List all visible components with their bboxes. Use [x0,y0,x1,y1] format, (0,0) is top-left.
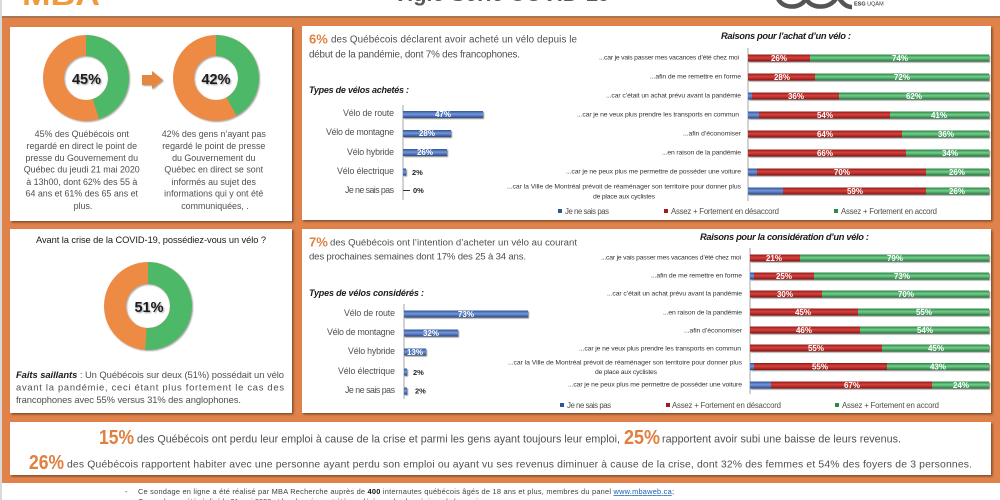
stat: 6% [309,32,578,60]
bar chart: raisons considération: 24% [953,381,969,390]
donut: 45% [54,46,118,110]
bar chart: types considérés: Je ne sais pas [345,385,396,395]
stat: 6%: des Québécois déclarent avoir acheté un vélo depuis le [331,34,578,46]
panel: emploi et revenus [10,422,991,475]
bar chart: types achetés: 2% [412,168,423,177]
bar chart: types achetés [326,105,483,200]
bar chart: types achetés: Vélo de montagne [326,127,394,137]
bar chart: raisons considération: ...car je ne peux plus me permettre de posséder une voiture [568,382,742,388]
bar chart: raisons achat: ...afin de me remettre en forme [650,74,741,80]
stat line: 15% et 25%: 15% [99,427,134,449]
legend: raisons achat: Assez + Fortement en désaccord [671,207,779,216]
stat line: 15% et 25%: des Québécois ont perdu leur emploi à cause de la crise et parmi les gens ayant toujours leur emploi, [137,434,620,446]
bar chart: raisons achat [507,48,989,201]
bar chart: raisons considération: 70% [898,290,914,299]
bar chart: raisons achat: 26% [771,54,787,63]
stat: 7% [309,234,577,262]
bar chart: types considérés: 13% [407,348,423,357]
stat line: 15% et 25%: 25% [624,427,660,449]
text: faits saillants: Faits saillants : Un Québécois sur deux (51%) possédait un vélo [16,369,284,380]
footnotes [125,487,674,500]
bar chart: raisons considération: 30% [777,290,793,299]
bar chart: raisons achat: ...afin d’économiser [683,130,742,138]
bar chart: raisons achat: 62% [906,92,922,101]
bar chart: types achetés: Vélo électrique [337,166,394,176]
bar chart: types considérés: 2% [413,368,424,377]
bar chart: raisons considération: 46% [796,326,812,335]
bar chart: types achetés: Vélo de route [343,108,394,118]
bar chart: raisons achat: 64% [817,130,833,139]
text: 45% description: à 13h00, dont 62% des 55 à [26,177,137,187]
legend: types considérés: Je ne sais pas [567,401,611,410]
text: 42% description: 42% des gens n’ayant pas [162,129,266,139]
donut: 42% [184,46,248,110]
legend: types achetés: Je ne sais pas [565,207,609,216]
bar chart: types considérés: Vélo de montagne [327,327,395,337]
text: 42% description: informations qui y ont été [164,188,263,198]
bar chart: raisons considération: ...afin d’économiser [684,328,743,334]
bar chart: types achetés: 47% [435,110,451,119]
bar chart: raisons achat: de place aux cyclistes [593,194,656,200]
panel: point de presse [10,27,292,221]
panel: vélos considérés [302,229,991,413]
bar chart: raisons considération: 67% [844,381,860,390]
text: 45% description: 64 ans et 61% des 65 ans et [26,188,139,198]
legend: raisons achat: Assez + Fortement en accord [841,207,937,216]
text: 42% description: regardé le point de presse [162,141,265,151]
text: faits saillants [16,369,284,405]
stat line: 15% et 25% [99,427,901,449]
bar chart: raisons achat: 36% [788,92,804,101]
footnotes: - [125,487,128,496]
bar chart: raisons achat: ...en raison de la pandémie [662,150,741,156]
legend: raisons considération: Assez + Fortement en accord [842,401,939,410]
page edge [0,0,2,500]
panel: possession vélo [10,229,292,413]
bar chart: raisons considération: ...afin de me remettre en forme [651,272,742,280]
heading: types considérés: Types de vélos considérés : [309,288,424,298]
bar chart: raisons achat: 36% [938,130,954,139]
bar chart: types achetés: Vélo hybride [347,147,394,157]
heading: raisons achat: Raisons pour l’achat d’un vélo : [721,31,851,41]
bar chart: raisons considération: ...car la Ville de Montréal prévoit de réaménager son territoire pour donner plus [508,360,743,366]
panel: vélos achetés [302,26,991,220]
bar chart: raisons considération: de place aux cyclistes [595,369,658,376]
footnotes: Ce sondage en ligne a été réalisé par MBA Recherche auprès de 400 internautes québécois âgés de 18 ans et plus, membres du panel www.mbaweb.ca; [138,487,674,496]
text: faits saillants: avant la pandémie, ceci étant plus fortement le cas des [16,382,284,392]
bar chart: raisons considération [508,248,989,394]
bar chart: raisons considération: ...car c’était un achat prévu avant la pandémie [607,290,742,298]
bar chart: types considérés: 73% [458,310,474,319]
bar chart: raisons achat: 26% [949,168,965,177]
bar chart: raisons achat: ...car je ne peux plus me permettre de posséder une voiture [566,168,741,176]
bar chart: types achetés: 28% [419,129,435,138]
text: 45% description: regardé en direct le point de [26,141,137,151]
bar chart: types achetés: 26% [417,148,433,157]
bar chart: raisons achat: 66% [817,149,833,158]
bar chart: types considérés: Vélo de route [344,308,395,318]
text: faits saillants: francophones avec 55% versus 31% des anglophones. [16,394,241,405]
bar chart: raisons considération: 55% [808,344,824,353]
bar chart: raisons achat: ...car je ne veux plus prendre les transports en commun [577,112,739,118]
bar chart: raisons considération: ...en raison de la pandémie [663,310,742,316]
bar chart: raisons achat: ...car c’était un achat prévu avant la pandémie [606,92,741,100]
text: 42% description: du Gouvernement du [172,153,256,163]
text: 45% description: 45% des Québécois ont [35,129,129,139]
text: 45% description: Québec du jeudi 21 mai 2020 [24,164,140,174]
stat line: 15% et 25%: rapportent avoir subi une baisse de leurs revenus. [662,434,901,446]
bar chart: raisons achat: 72% [894,73,910,82]
stat: 6%: 6% [309,32,328,46]
donut: 45%: 45% [72,71,101,88]
donut: 42%: 42% [202,71,230,88]
bar chart: types considérés: 32% [423,329,439,338]
bar chart: raisons considération: 55% [812,362,828,372]
bar chart: raisons achat: 26% [949,187,965,196]
heading: types achetés: Types de vélos achetés : [309,85,409,95]
bar chart: raisons achat: 41% [931,111,947,120]
logo: ESG UQAM [777,0,884,8]
legend: raisons achat [664,207,937,216]
bar chart: raisons considération: 43% [930,362,946,372]
stat: 7%: 7% [309,234,328,250]
bar chart: raisons achat: 70% [834,168,850,177]
bar chart: raisons considération: 21% [766,254,782,263]
text: 42% description: informés au sujet des [172,177,257,187]
text: 45% description: plus. [74,201,92,211]
bar chart: raisons considération: ...car je vais passer mes vacances d’été chez moi [601,254,741,262]
bar chart: raisons achat: 54% [817,111,833,120]
heading: raisons considération: Raisons pour la considération d’un vélo : [700,232,869,242]
arrow [142,71,163,89]
bar chart: raisons considération: 73% [894,272,910,281]
legend: raisons considération: Assez + Fortement en désaccord [672,401,781,410]
stat: 7%: des Québécois ont l’intention d’acheter un vélo au courant [330,238,577,248]
bar chart: raisons considération: 45% [795,308,811,317]
text: 45% description: presse du Gouvernement du [26,153,138,163]
bar chart: types considérés: Vélo hybride [348,346,395,356]
bar chart: raisons achat: 59% [847,187,863,196]
donut: 51% [115,273,181,339]
bar chart: raisons considération: ...car je ne veux plus prendre les transports en commun [579,346,741,352]
bar chart: raisons achat: 34% [942,149,958,158]
header shadow [2,16,1000,18]
bar chart: raisons considération: 79% [887,254,903,263]
logo: ESG UQAM: ESG UQÀM [854,0,884,8]
bar chart: types considérés: Vélo électrique [338,366,395,376]
bar chart: raisons considération: 55% [916,308,932,317]
bar chart: raisons achat: 28% [774,73,790,82]
text: 42% description: Québec en direct se sont [164,164,264,174]
heading: possession: Avant la crise de la COVID-19, possédiez-vous un vélo ? [36,235,266,245]
stat line: 26%: 26% [29,452,64,474]
bar chart: types considérés: 2% [415,386,426,396]
bar chart: raisons considération: 45% [928,344,944,353]
bar chart: types considérés [327,304,528,399]
bar chart: types achetés: 0% [413,186,424,195]
bar chart: raisons achat: 74% [892,54,908,63]
stat line: 26% [29,452,972,474]
bar chart: raisons considération: 54% [917,326,933,335]
stat: 6%: début de la pandémie, dont 7% des francophones. [309,50,520,60]
bar chart: raisons achat: ...car la Ville de Montréal prévoit de réaménager son territoire pour donner plus [507,184,742,190]
bar chart: types achetés: Je ne sais pas [345,185,395,195]
legend: raisons considération [666,401,939,410]
donut: 51%: 51% [134,299,164,316]
bar chart: raisons achat: ...car je vais passer mes vacances d’été chez moi [599,54,739,62]
bar chart: raisons considération: 25% [776,272,792,281]
stat: 7%: des prochaines semaines dont 17% des 25 à 34 ans. [309,252,526,262]
stat line: 26%: des Québécois rapportent habiter avec une personne ayant perdu son emploi ou ayant vu ses revenus diminuer à cause de la crise, dont 32% des femmes et 54% des foyers de 3 personnes. [67,460,972,470]
text: 42% description: communiquées, . [181,201,249,211]
